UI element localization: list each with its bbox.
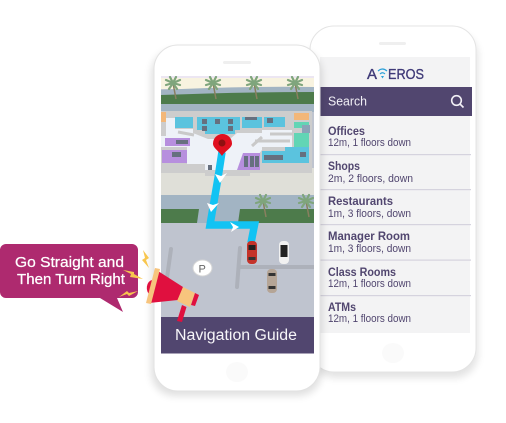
list item: Offices: 12m, 1 floors down (328, 137, 411, 149)
car: white (279, 241, 289, 264)
palm trees (166, 77, 302, 99)
location pin (213, 134, 232, 156)
icon: megaphone (119, 250, 199, 322)
speech bubble (0, 244, 138, 312)
list item: Shops (328, 161, 413, 185)
list item: Shops: Shops (328, 161, 360, 173)
navigation guide banner (161, 317, 314, 354)
route arrows (207, 173, 239, 232)
parking sign (193, 260, 212, 276)
palm trees: lower (256, 195, 313, 217)
list item: ATMs: 12m, 1 floors down (328, 313, 411, 325)
navigation guide banner: Navigation Guide (175, 327, 297, 344)
list item: Restaurants: Restaurants (328, 196, 393, 208)
list item: Restaurants (328, 196, 411, 220)
road and planters (161, 195, 314, 223)
speech bubble: Go Straight and (15, 254, 124, 271)
list item: Manager Room: 1m, 3 floors, down (328, 243, 411, 255)
speech bubble: Then Turn Right (17, 271, 126, 288)
car: red (247, 241, 257, 264)
logo: EROS (388, 66, 424, 83)
parking lines (166, 248, 314, 287)
search bar: Search (328, 94, 367, 108)
list item: ATMs: ATMs (328, 302, 356, 314)
list item: Class Rooms (328, 267, 411, 290)
list item: Manager Room: Manager Room (328, 231, 410, 243)
logo: A (367, 66, 377, 83)
map (161, 76, 314, 317)
car: tan (267, 269, 277, 293)
list item: Class Rooms: Class Rooms (328, 267, 396, 279)
list item: Restaurants: 1m, 3 floors, down (328, 208, 411, 220)
spark bolts (119, 250, 149, 297)
list item: ATMs (328, 302, 411, 325)
list item: Shops: 2m, 2 floors, down (328, 173, 413, 185)
parking sign: P (198, 264, 206, 276)
icon: search (452, 96, 464, 108)
list item: Offices: Offices (328, 126, 365, 138)
list item: Offices (328, 126, 411, 149)
route line (210, 152, 254, 243)
app screen (320, 57, 472, 333)
building floor plan (161, 111, 312, 176)
phone: search list (310, 26, 478, 378)
phone: navigation (151, 45, 322, 396)
pavement (161, 168, 314, 196)
list item: Manager Room (328, 231, 411, 255)
logo (367, 66, 424, 83)
green planter: right (238, 209, 314, 223)
search bar (320, 87, 472, 116)
list item: Class Rooms: 12m, 1 floors down (328, 278, 411, 290)
green planter: left (161, 209, 199, 223)
